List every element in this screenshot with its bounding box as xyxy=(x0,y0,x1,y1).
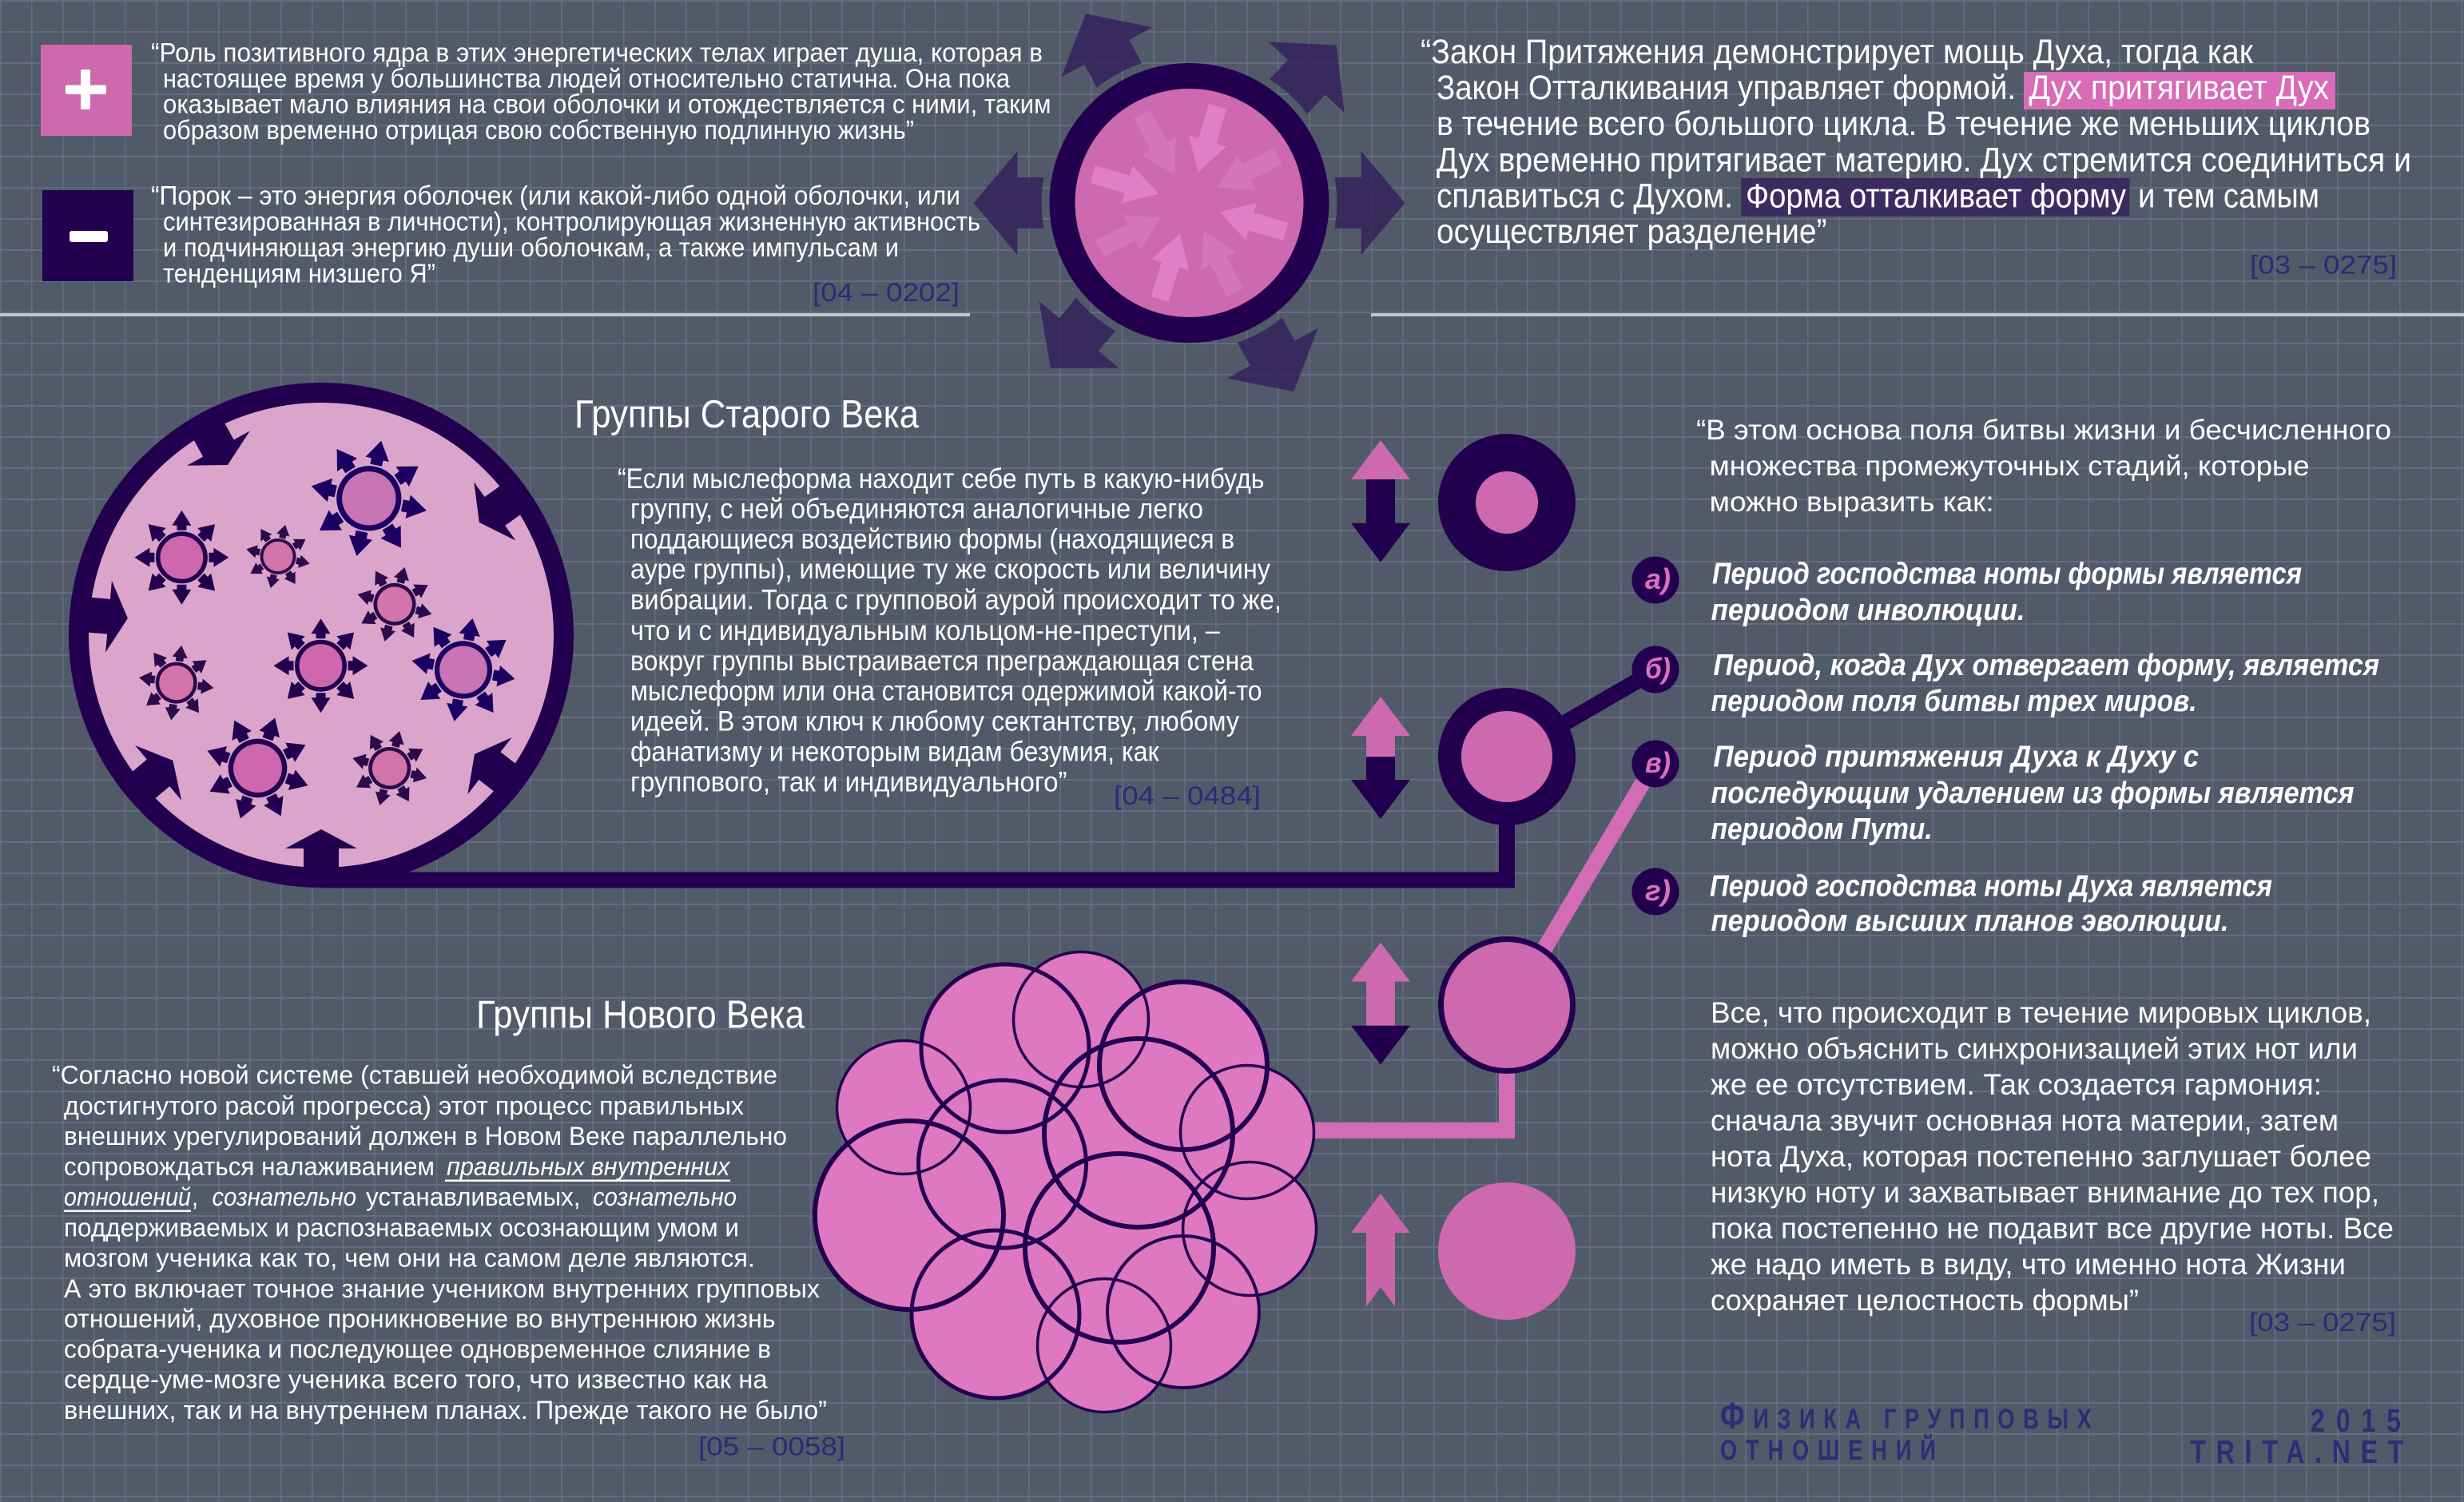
footer: year and site: 2015 xyxy=(2311,1402,2401,1439)
connector: to badge b xyxy=(1562,681,1636,725)
reference: 03-0275 bottom: [03 – 0275] xyxy=(2249,1308,2396,1337)
text block: old age quote: фанатизму и некоторым видам безумия, как xyxy=(630,736,1159,767)
text block: law of attraction quote: и тем самым xyxy=(2138,177,2319,216)
text block: world cycles: низкую ноту и захватывает внимание до тех пор, xyxy=(1711,1176,2379,1209)
reference: 04-0202: [04 – 0202] xyxy=(813,278,960,307)
small forms with radiating arrows xyxy=(299,428,439,568)
text block: new age quote: устанавливаемых, xyxy=(366,1182,580,1211)
inward arrows xyxy=(1087,101,1291,305)
text block: world cycles xyxy=(1711,996,2394,1317)
arrow: balanced up and down xyxy=(1351,697,1410,819)
text block: law of attraction quote: Дух притягивает Дух xyxy=(2029,69,2329,107)
text block: battlefield intro quote xyxy=(1696,415,2391,518)
list item: a: периодом инволюции. xyxy=(1711,594,2025,627)
diagram: central circle with arrows xyxy=(973,0,1405,417)
list item: g: Период господства ноты Духа является xyxy=(1710,870,2272,904)
text block: new age quote: отношений, духовное проникновение во внутреннюю жизнь xyxy=(64,1304,775,1333)
badge: g: г) xyxy=(1645,874,1671,907)
reference: 04-0484: [04 – 0484] xyxy=(1114,781,1261,810)
connector: dark line from old age group xyxy=(321,815,1507,880)
text block: positive core quote: “Роль позитивного ядра в этих энергетических телах играет душа, которая в xyxy=(151,38,1043,67)
text block: old age quote: группового, так и индивидуального” xyxy=(630,766,1067,797)
footer: year and site xyxy=(2191,1402,2404,1470)
text block: new age quote: “Согласно новой системе (ставшей необходимой вследствие xyxy=(52,1061,777,1090)
connector: pink line from new age group xyxy=(1310,1067,1507,1130)
list item: a xyxy=(1711,558,2302,627)
icon: note circle small core xyxy=(1457,452,1556,553)
text block: new age quote: сердце-уме-мозге ученика всего того, что известно как на xyxy=(64,1365,769,1393)
text block: old age quote: ауре группы), имеющие ту же скорость или величину xyxy=(630,554,1270,585)
text block: battlefield intro quote: можно выразить как: xyxy=(1710,487,1994,518)
list item: b: Период, когда Дух отвергает форму, является xyxy=(1713,649,2379,682)
text block: new age quote: , xyxy=(192,1182,198,1211)
arrow: pink long shaft small dark head xyxy=(1351,943,1410,1065)
badge: g xyxy=(1631,868,1679,916)
badge: a: а) xyxy=(1645,562,1671,595)
heading: new age groups: Группы Нового Века xyxy=(476,994,805,1037)
icon: minus box xyxy=(42,190,133,281)
icon: note circle thin ring xyxy=(1441,940,1572,1071)
text block: new age quote: внешних, так и на внутреннем планах. Прежде такого не было” xyxy=(64,1396,827,1425)
text block: new age quote: достигнутого расой прогресса) этот процесс правильных xyxy=(64,1091,744,1120)
inward ring arrows xyxy=(81,409,536,873)
text block: old age quote xyxy=(618,463,1282,797)
text block: law of attraction quote: Закон Отталкивания управляет формой. xyxy=(1437,69,2016,107)
heading: old age groups: Группы Старого Века xyxy=(574,393,920,436)
reference: 03-0275 top: [03 – 0275] xyxy=(2250,251,2397,280)
text block: new age quote: поддерживаемых и распознаваемых осознающим умом и xyxy=(64,1213,739,1242)
text block: law of attraction quote: в течение всего большого цикла. В течение же меньших циклов xyxy=(1437,105,2371,143)
text block: world cycles: сохраняет целостность формы” xyxy=(1711,1284,2139,1317)
text block: old age quote: “Если мыслеформа находит себе путь в какую-нибудь xyxy=(618,463,1264,495)
badge: b: б) xyxy=(1645,652,1671,685)
icon: note circle medium core xyxy=(1449,700,1564,813)
badge: a xyxy=(1631,556,1679,604)
badge: v xyxy=(1631,740,1679,788)
text block: old age quote: группу, с ней объединяются аналогичные легко xyxy=(630,494,1203,525)
text block: new age quote xyxy=(52,1061,827,1425)
text block: old age quote: вокруг группы выстраивается преграждающая стена xyxy=(630,646,1254,677)
connector: pink line to badge v xyxy=(1540,783,1643,956)
text block: world cycles: сначала звучит основная нота материи, затем xyxy=(1711,1104,2339,1137)
ring and core xyxy=(1063,76,1317,330)
text block: vice quote: синтезированная в личности), контролирующая жизненную активность xyxy=(163,206,980,236)
footer: year and site: TRITA.NET xyxy=(2191,1433,2404,1470)
text block: new age quote: сопровождаться налаживанием xyxy=(64,1152,435,1181)
text block: new age quote: сознательно xyxy=(593,1182,737,1211)
list item: a: Период господства ноты формы является xyxy=(1712,558,2302,591)
text block: old age quote: что и с индивидуальным кольцом-не-преступи, – xyxy=(630,615,1220,646)
text block: new age quote: отношений xyxy=(64,1182,191,1211)
footer: title xyxy=(1720,1396,2092,1466)
arrow: all pink up xyxy=(1351,1194,1410,1307)
text block: battlefield intro quote: множества промежуточных стадий, которые xyxy=(1710,451,2310,482)
text block: vice quote: тенденциям низшего Я” xyxy=(163,258,435,288)
text block: new age quote: правильных внутренних xyxy=(447,1152,731,1181)
list item: b xyxy=(1711,649,2379,718)
text block: new age quote: А это включает точное знание учеником внутренних групповых xyxy=(64,1274,820,1303)
footer: title: Ф ИЗИКА ГРУППОВЫХ xyxy=(1720,1396,2092,1436)
text block: positive core quote: образом временно отрицая свою собственную подлинную жизнь” xyxy=(163,115,914,145)
text block: world cycles: Все, что происходит в течение мировых циклов, xyxy=(1711,996,2371,1029)
list item: v: периодом Пути. xyxy=(1711,813,1933,846)
badge: b xyxy=(1631,646,1679,693)
text block: new age quote: внешних урегулирований должен в Новом Веке параллельно xyxy=(64,1122,787,1150)
reference: 05-0058: [05 – 0058] xyxy=(698,1432,845,1461)
list item: v: Период притяжения Духа к Духу с xyxy=(1713,740,2199,773)
list item: b: периодом поля битвы трех миров. xyxy=(1711,685,2197,718)
text block: new age quote: сознательно xyxy=(213,1182,356,1211)
footer: title: ОТНОШЕНИЙ xyxy=(1720,1434,1936,1466)
text block: old age quote: мыслеформ или она становится одержимой какой-то xyxy=(630,676,1262,707)
text block: vice quote xyxy=(151,181,980,288)
icon: full pink circle xyxy=(1438,1182,1576,1320)
badge: v: в) xyxy=(1645,746,1671,779)
list item: g xyxy=(1710,870,2272,938)
text block: vice quote: и подчиняющая энергию души оболочкам, а также импульсам и xyxy=(163,232,899,262)
text block: new age quote: мозгом ученика как то, чем они на самом деле являются. xyxy=(64,1244,755,1273)
text block: law of attraction quote: Форма отталкивает форму xyxy=(1746,177,2126,216)
text block: new age quote: собрата-ученика и последующее одновременное слияние в xyxy=(64,1334,771,1363)
text block: world cycles: можно объяснить синхронизацией этих нот или xyxy=(1711,1032,2358,1065)
text block: battlefield intro quote: “В этом основа поля битвы жизни и бесчисленного xyxy=(1696,415,2391,446)
text block: vice quote: “Порок – это энергия оболочек (или какой-либо одной оболочки, или xyxy=(151,181,960,210)
diagram: new age overlapping circles xyxy=(813,951,1317,1413)
outward arrows xyxy=(973,0,1405,417)
text block: old age quote: поддающиеся воздействию формы (находящиеся в xyxy=(630,524,1234,555)
text block: positive core quote xyxy=(151,38,1051,145)
arrow: pink up, dark down with long dark shaft xyxy=(1351,440,1410,562)
text block: world cycles: нота Духа, которая постепенно заглушает более xyxy=(1711,1140,2371,1173)
text block: world cycles: же ее отсутствием. Так создается гармония: xyxy=(1711,1068,2322,1101)
text block: old age quote: вибрации. Тогда с групповой аурой происходит то же, xyxy=(630,584,1282,615)
text block: positive core quote: оказывает мало влияния на свои оболочки и отождествляется с ними, таким xyxy=(163,89,1051,119)
text block: law of attraction quote: “Закон Притяжения демонстрирует мощь Духа, тогда как xyxy=(1421,33,2254,71)
list item: g: периодом высших планов эволюции. xyxy=(1711,904,2229,938)
text block: positive core quote: настоящее время у большинства людей относительно статична. Она пока xyxy=(163,64,1011,93)
text block: world cycles: пока постепенно не подавит все другие ноты. Все xyxy=(1711,1212,2394,1245)
text block: old age quote: идеей. В этом ключ к любому сектантству, любому xyxy=(630,706,1239,737)
text block: law of attraction quote: осуществляет разделение” xyxy=(1437,213,1826,251)
list item: v: последующим удалением из формы является xyxy=(1711,777,2355,810)
icon: plus box xyxy=(41,45,132,136)
text block: law of attraction quote: сплавиться с Духом. xyxy=(1437,177,1733,216)
text block: world cycles: же надо иметь в виду, что именно нота Жизни xyxy=(1711,1248,2346,1281)
text block: law of attraction quote xyxy=(1421,33,2411,251)
diagram: old age group circle xyxy=(78,393,564,877)
list item: v xyxy=(1711,740,2355,846)
